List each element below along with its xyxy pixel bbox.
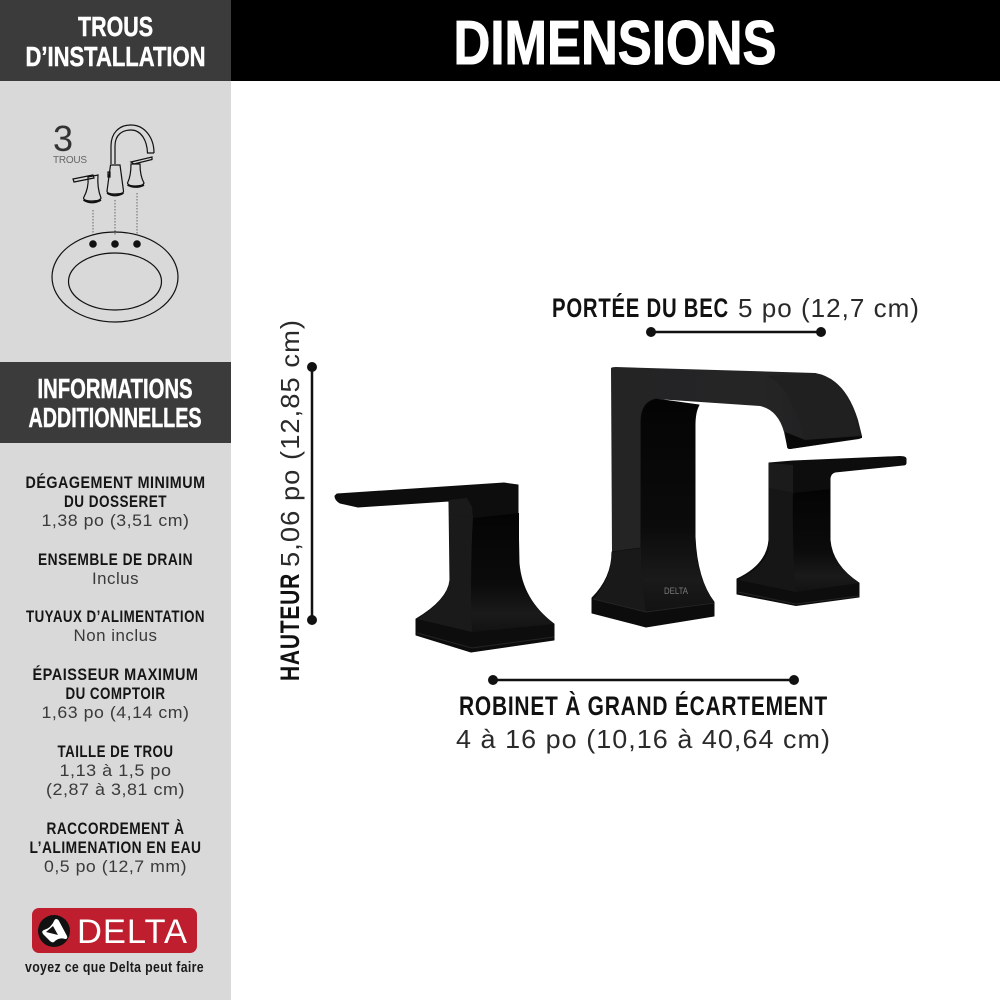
spec: taille de trou: 1,13 à 1,5 po xyxy=(60,761,172,780)
spec: dégagement minimum: 1,38 po (3,51 cm) xyxy=(42,511,190,530)
faucet: left handle xyxy=(335,483,554,652)
number of holes: 3 xyxy=(53,118,73,159)
faucet brand mark: DELTA xyxy=(664,586,688,596)
sidebar background xyxy=(0,0,231,1000)
icon: spout xyxy=(107,125,154,196)
spec: ensemble de drain xyxy=(38,550,193,588)
dimension: portée du bec: 5 po (12,7 cm) xyxy=(738,293,920,323)
spec: épaisseur maximum: 1,63 po (4,14 cm) xyxy=(42,703,190,722)
spec: tuyaux d'alimentation: Non inclus xyxy=(74,626,158,645)
header: informations additionnelles: ADDITIONNELLES xyxy=(28,402,202,433)
faucet: centre spout xyxy=(592,367,862,627)
header: trous d'installation: TROUS xyxy=(78,11,153,42)
number of holes xyxy=(53,118,87,166)
title banner: dimensions xyxy=(231,0,1000,81)
dimension: robinet à grand écartement: 4 à 16 po (10,16 à 40,64 cm) xyxy=(456,724,831,754)
logo: delta xyxy=(25,908,204,976)
dimension: robinet à grand écartement xyxy=(456,675,831,754)
icon: sink basin xyxy=(52,232,178,322)
header: informations additionnelles: INFORMATIONS xyxy=(38,373,192,404)
logo: delta: DELTA xyxy=(77,913,187,951)
number of holes: TROUS xyxy=(53,155,87,166)
spec: dégagement minimum: DU DOSSERET xyxy=(64,492,167,511)
spec: raccordement: RACCORDEMENT À xyxy=(46,819,184,838)
spec: épaisseur maximum xyxy=(32,665,198,722)
spec: raccordement xyxy=(30,819,202,876)
faucet: right handle xyxy=(737,456,906,606)
dimension: hauteur: 5,06 po (12,85 cm) xyxy=(275,319,305,567)
spec: dégagement minimum: DÉGAGEMENT MINIMUM xyxy=(26,473,206,492)
dimension: hauteur: HAUTEUR xyxy=(275,573,305,681)
dimension: robinet à grand écartement: ROBINET À GRAND ÉCARTEMENT xyxy=(459,690,828,721)
icon: faucet and sink installation diagram xyxy=(52,118,178,322)
header: trous d'installation: D’INSTALLATION xyxy=(26,41,206,72)
spec: raccordement: 0,5 po (12,7 mm) xyxy=(44,857,187,876)
icon: left handle xyxy=(73,175,101,202)
logo: delta: voyez ce que Delta peut faire xyxy=(25,960,204,976)
spec: taille de trou: (2,87 à 3,81 cm) xyxy=(46,780,185,799)
spec: tuyaux d'alimentation xyxy=(26,607,205,645)
sink holes xyxy=(89,240,141,248)
spec: raccordement: L’ALIMENATION EN EAU xyxy=(30,838,202,857)
spec: ensemble de drain: Inclus xyxy=(92,569,139,588)
dimension: portée du bec: PORTÉE DU BEC xyxy=(552,292,729,323)
header: informations additionnelles xyxy=(0,362,231,443)
spec: ensemble de drain: ENSEMBLE DE DRAIN xyxy=(38,550,193,569)
header: trous d'installation xyxy=(0,0,231,81)
dimension: portée du bec xyxy=(552,292,920,337)
spec: épaisseur maximum: ÉPAISSEUR MAXIMUM xyxy=(32,665,198,684)
spec: tuyaux d'alimentation: TUYAUX D’ALIMENTATION xyxy=(26,607,205,626)
spec: taille de trou: TAILLE DE TROU xyxy=(58,742,174,761)
connection dotted lines xyxy=(93,193,137,235)
title banner: dimensions: DIMENSIONS xyxy=(454,9,776,78)
spec: dégagement minimum xyxy=(26,473,206,530)
spec: taille de trou xyxy=(46,742,185,799)
dimension: hauteur xyxy=(275,319,317,681)
spec: épaisseur maximum: DU COMPTOIR xyxy=(66,684,166,703)
